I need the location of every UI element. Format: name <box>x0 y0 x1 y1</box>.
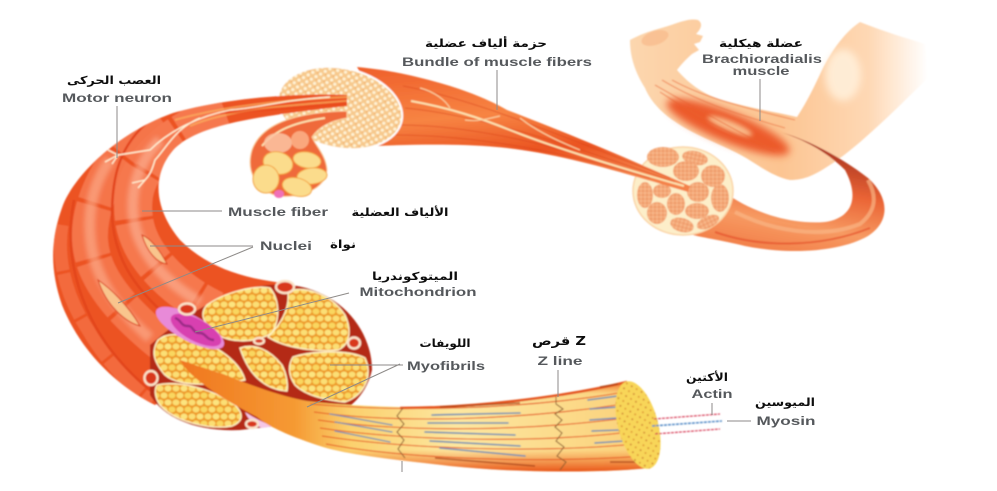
motor neuron branches <box>105 97 330 188</box>
label: bundle of muscle fibers: حزمة ألياف عضلية <box>425 36 547 50</box>
blood vessels <box>144 281 360 428</box>
actin and myosin streaks <box>330 396 624 456</box>
label: Z line <box>532 334 586 368</box>
large muscle bundle curving from the arm <box>693 132 884 251</box>
label: nuclei: نواة <box>330 238 356 251</box>
myofibril with Z lines and filaments <box>180 360 722 474</box>
cross-section of muscle fibre <box>144 281 372 430</box>
label: muscle fiber: Muscle fiber <box>228 205 328 219</box>
bundle of muscle fibers tube <box>357 67 690 192</box>
muscle fibre nucleus upper <box>142 235 167 264</box>
label: muscle fiber: الألياف العضلية <box>352 205 448 219</box>
label: bundle of muscle fibers <box>402 36 592 69</box>
mitochondrion <box>150 299 230 357</box>
label: muscle fiber <box>228 205 448 219</box>
label: myofibrils: Myofibrils <box>407 359 485 373</box>
label: motor neuron: العصب الحركى <box>67 74 161 87</box>
label: nuclei <box>260 238 356 253</box>
label: myosin <box>755 396 816 428</box>
label: Z line: Z line <box>538 354 583 368</box>
filaments <box>652 414 722 434</box>
label: mitochondrion: الميتوكوندريا <box>372 270 458 283</box>
small fibre cross-section <box>250 111 347 200</box>
bundle cross-section <box>270 56 410 160</box>
label: brachioradialis muscle: Brachioradialis <box>702 52 822 66</box>
label: myosin: الميوسين <box>755 396 815 409</box>
label: brachioradialis muscle <box>702 37 822 78</box>
label: mitochondrion <box>360 270 476 299</box>
label: motor neuron: Motor neuron <box>62 91 172 105</box>
label: myosin: Myosin <box>756 414 816 428</box>
muscle fibre nucleus lower <box>98 280 140 326</box>
label: mitochondrion: Mitochondrion <box>360 285 476 299</box>
label: actin: الأكتين <box>686 370 728 384</box>
label: brachioradialis muscle: muscle <box>732 64 790 78</box>
leader lines <box>117 70 760 472</box>
label: motor neuron <box>62 74 172 105</box>
label: Z line: قرص Z <box>532 334 586 348</box>
label: actin <box>686 370 732 401</box>
arm cross-section with fascicles <box>633 147 733 235</box>
pink sheath lower <box>245 412 275 428</box>
labels <box>62 36 822 428</box>
label: nuclei: Nuclei <box>260 239 312 253</box>
label: myofibrils: اللويفات <box>420 337 470 350</box>
label: actin: Actin <box>692 387 732 401</box>
label: bundle of muscle fibers: Bundle of muscle fibers <box>402 55 592 69</box>
curved muscle fibre bundle <box>53 95 347 405</box>
label: brachioradialis muscle: عضلة هيكلية <box>719 37 803 50</box>
arm with brachioradialis muscle <box>630 19 928 180</box>
label: myofibrils <box>407 337 485 373</box>
myofibril bundles <box>154 287 368 427</box>
